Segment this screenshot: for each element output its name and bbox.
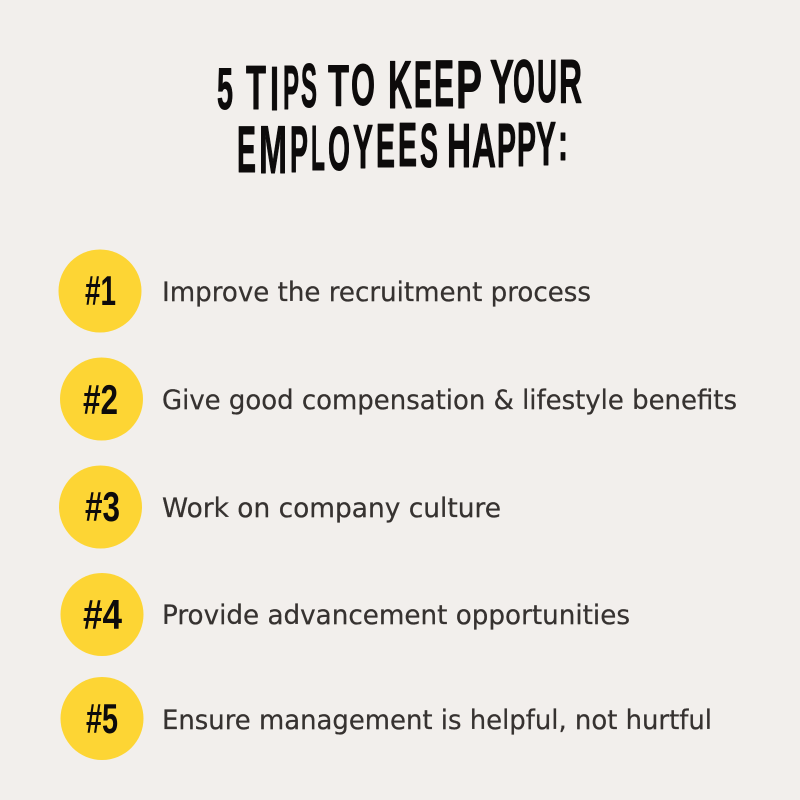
tip text 1: Improve the recruitment process [162, 277, 591, 308]
tip 1 [58, 250, 591, 332]
title: Y [536, 110, 556, 179]
title: Y [353, 113, 373, 182]
title: E [414, 47, 432, 121]
title: L [311, 112, 325, 184]
title: 5 [217, 57, 233, 122]
title: T [246, 54, 266, 123]
tip text 2: Give good compensation & lifestyle benefits [162, 385, 737, 416]
title: P [517, 111, 536, 180]
tip 2 [60, 358, 737, 440]
tip text 4: Provide advancement opportunities [162, 600, 630, 631]
title: P [497, 112, 516, 181]
title: E [434, 46, 454, 120]
title: : [558, 112, 568, 172]
title: E [398, 111, 417, 180]
title: K [388, 47, 412, 123]
title: E [237, 112, 256, 186]
title: E [376, 112, 395, 181]
number badge 1 [58, 250, 142, 332]
title: P [283, 54, 299, 123]
title: M [259, 112, 287, 188]
title: S [420, 112, 438, 181]
number badge 1: #1 [85, 267, 116, 314]
number badge 5 [60, 677, 144, 760]
title: O [328, 115, 350, 184]
number badge 4 [60, 573, 144, 656]
number badge 2: #2 [83, 376, 118, 423]
title: O [513, 48, 535, 115]
number badge 5: #5 [86, 695, 118, 742]
title: R [559, 48, 582, 117]
title: Y [490, 48, 514, 117]
title [217, 46, 582, 188]
tip text 3: Work on company culture [162, 493, 501, 524]
tip text 5: Ensure management is helpful, not hurtful [162, 705, 712, 736]
title: S [301, 52, 317, 121]
number badge 3: #3 [85, 483, 120, 530]
tip 3 [59, 466, 501, 548]
number badge 4: #4 [83, 591, 123, 638]
number badge 2 [60, 358, 143, 440]
title: P [456, 47, 482, 123]
tip 5 [60, 677, 712, 760]
tip 4 [60, 573, 630, 656]
title: H [447, 112, 471, 181]
number badge 3 [59, 466, 142, 548]
title: T [328, 54, 349, 119]
title: U [537, 48, 557, 115]
title: A [472, 112, 496, 181]
title: O [351, 53, 375, 118]
title: P [290, 112, 308, 186]
title: I [270, 55, 279, 124]
